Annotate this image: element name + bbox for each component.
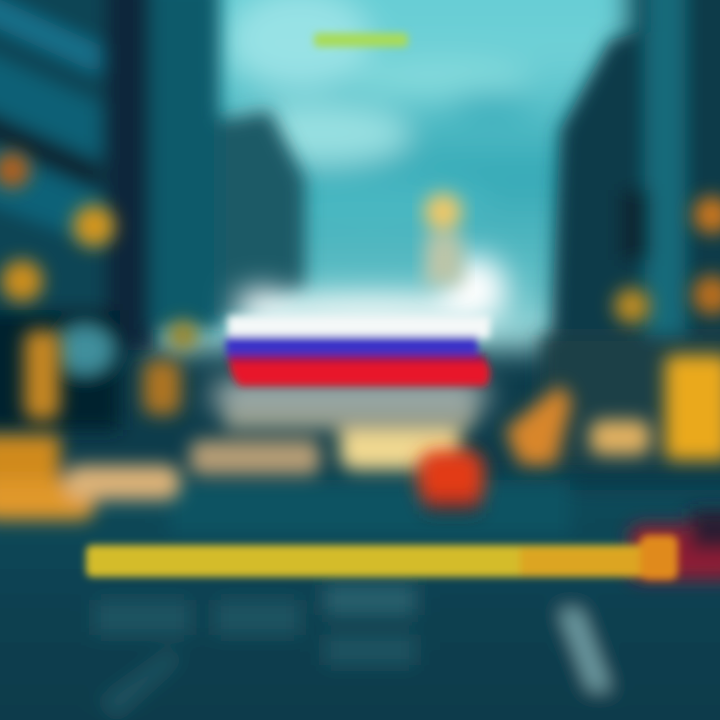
street [0,480,720,720]
city lights [0,152,720,520]
monument tower [424,193,463,285]
white cloud behind flag [215,256,507,407]
yellow banner bar [86,535,678,580]
top yellow heading bar [314,33,408,47]
flag [226,316,490,386]
sky [150,0,630,350]
left buildings [0,0,305,430]
right buildings [540,0,720,465]
right vehicle [630,510,720,580]
red car [418,450,484,512]
